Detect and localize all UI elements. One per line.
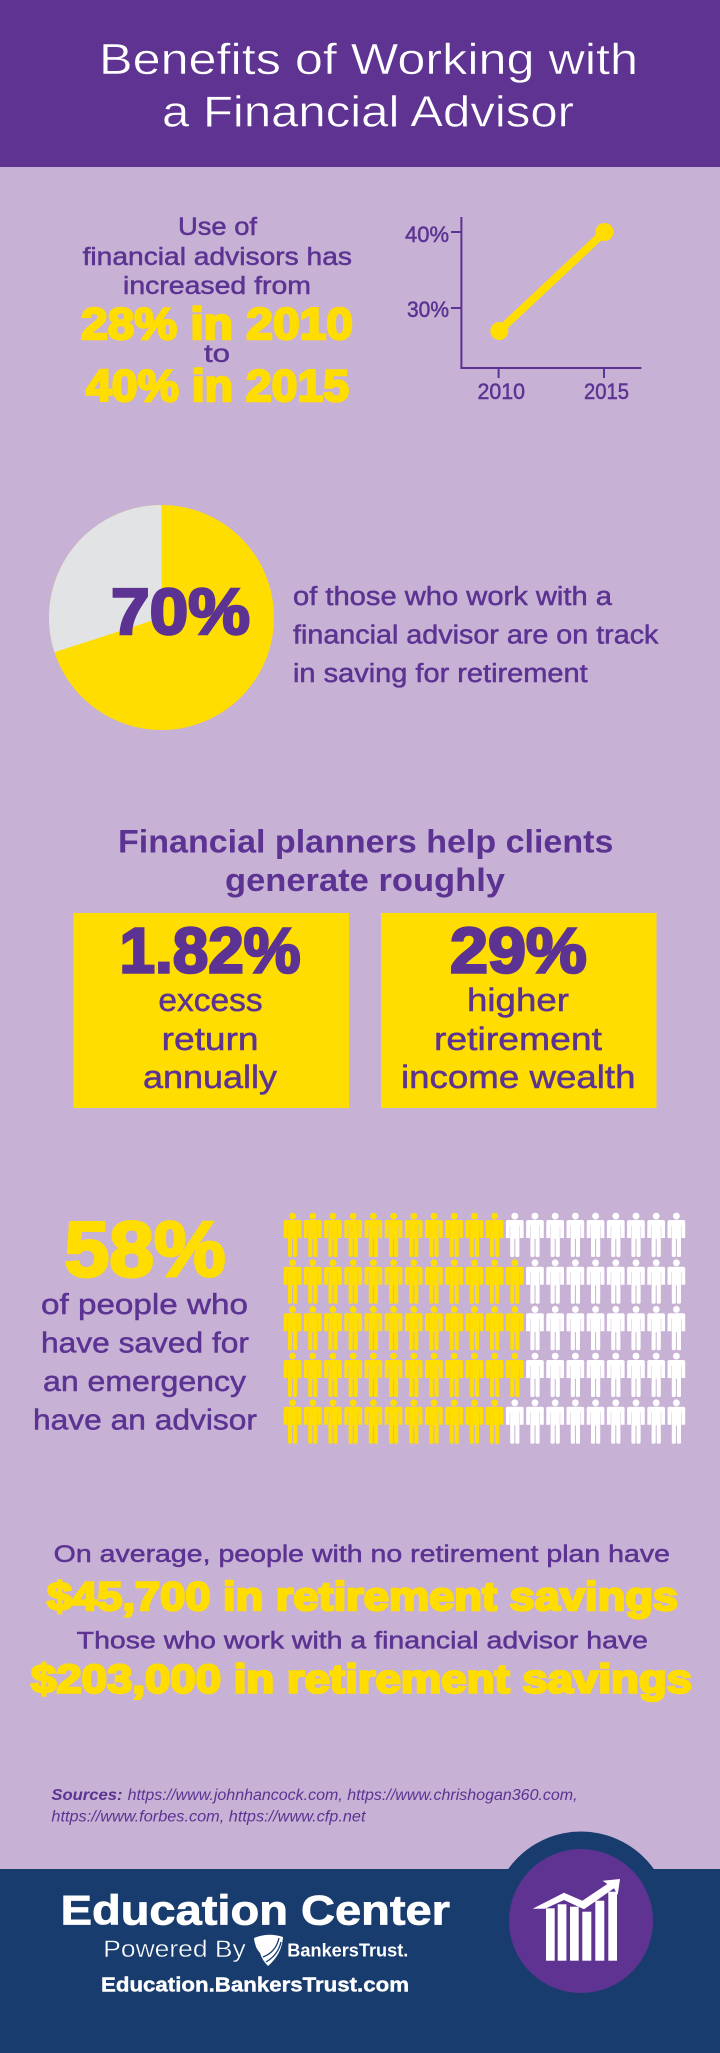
panel: 58 percent text bbox=[33, 1205, 257, 1436]
line chart: 2010 to 2015: 40% bbox=[405, 222, 449, 247]
panel: 58 percent text: 58% bbox=[64, 1205, 226, 1293]
website url: Education.BankersTrust.com bbox=[101, 1975, 409, 1997]
panel: use of financial advisors text: to bbox=[204, 340, 230, 368]
footer band bbox=[0, 1832, 720, 2053]
panel: 1.82 percent box: return bbox=[162, 1021, 259, 1057]
people pictogram bbox=[284, 1213, 685, 1444]
panel: retirement savings comparison: $203,000 in retirement savings bbox=[31, 1658, 692, 1702]
Bankers Trust wordmark: BankersTrust. bbox=[287, 1940, 408, 1961]
sources: https://www.forbes.com, https://www.cfp.net bbox=[51, 1809, 366, 1826]
footer heading: Education Center bbox=[61, 1886, 450, 1933]
panel: 70 percent pie bbox=[49, 505, 659, 730]
line chart: 2010 to 2015: 2015 bbox=[584, 379, 629, 404]
heading: financial planners: Financial planners help clients bbox=[118, 824, 613, 860]
panel: 58 percent text: have an advisor bbox=[33, 1404, 257, 1436]
panel: 29 percent box bbox=[381, 913, 656, 1108]
line chart: 2010 to 2015 bbox=[405, 217, 641, 404]
icon: growth chart badge bbox=[509, 1849, 653, 1993]
panel: 29 percent box: 29% bbox=[450, 915, 587, 987]
title bbox=[99, 36, 638, 136]
panel: retirement savings comparison bbox=[31, 1541, 692, 1702]
panel: 1.82 percent box: annually bbox=[143, 1059, 278, 1095]
icon: Bankers Trust shield bbox=[254, 1935, 283, 1966]
panel: retirement savings comparison: Those who work with a financial advisor have bbox=[77, 1628, 648, 1655]
pie description: of those who work with a bbox=[293, 583, 613, 611]
panel: 58 percent text: have saved for bbox=[41, 1328, 249, 1360]
pie description: in saving for retirement bbox=[293, 660, 588, 688]
powered by: Powered By bbox=[103, 1936, 246, 1963]
panel: use of financial advisors text: financial advisors has bbox=[83, 243, 352, 271]
panel: use of financial advisors text bbox=[81, 213, 353, 411]
panel: use of financial advisors text: 28% in 2010 bbox=[81, 300, 353, 349]
panel: 58 percent text: an emergency bbox=[43, 1366, 247, 1398]
line chart: 2010 to 2015: 2010 bbox=[478, 379, 525, 404]
panel: 29 percent box: higher bbox=[467, 982, 569, 1018]
title: Benefits of Working with bbox=[99, 36, 638, 84]
pie description bbox=[293, 583, 659, 688]
sources bbox=[51, 1787, 578, 1826]
panel: retirement savings comparison: $45,700 in retirement savings bbox=[47, 1575, 678, 1619]
panel: 29 percent box: income wealth bbox=[401, 1059, 636, 1095]
title: a Financial Advisor bbox=[162, 88, 574, 136]
sources: Sources: bbox=[51, 1787, 123, 1804]
panel: 58 percent text: of people who bbox=[41, 1289, 248, 1321]
heading: financial planners bbox=[118, 824, 613, 898]
heading: financial planners: generate roughly bbox=[225, 862, 505, 898]
line chart: 2010 to 2015: 30% bbox=[407, 297, 449, 322]
pie description: financial advisor are on track bbox=[293, 622, 659, 650]
header banner bbox=[0, 0, 720, 167]
panel: use of financial advisors text: Use of bbox=[178, 213, 257, 241]
panel: 29 percent box: retirement bbox=[434, 1021, 602, 1057]
panel: use of financial advisors text: increased from bbox=[123, 272, 311, 300]
panel: use of financial advisors text: 40% in 2015 bbox=[86, 362, 349, 411]
pie chart bbox=[49, 505, 274, 730]
panel: 1.82 percent box: excess bbox=[158, 982, 263, 1018]
panel: retirement savings comparison: On average, people with no retirement plan have bbox=[54, 1541, 670, 1568]
panel: 1.82 percent box bbox=[74, 913, 349, 1108]
panel: 1.82 percent box: 1.82% bbox=[120, 915, 300, 987]
sources: https://www.johnhancock.com, https://www.chrishogan360.com, bbox=[128, 1787, 578, 1804]
70 percent figure: 70% bbox=[111, 575, 250, 648]
